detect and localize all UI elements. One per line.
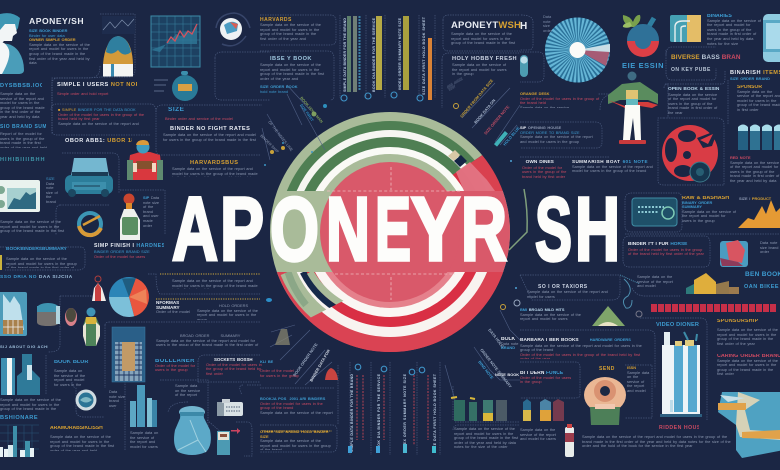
heading: so or taxiors: SO I OR TAXIORS <box>538 284 588 290</box>
top vertical columns <box>341 16 432 101</box>
icon: green figure <box>83 308 100 346</box>
bottom vertical columns: BOOK DIA BINDER FOR THE SERVICE <box>377 373 381 452</box>
big circle emblem <box>270 112 510 352</box>
radial labels upper right: SIZE ORDER NOTE <box>483 104 511 136</box>
heading and text: holy hobby: HOLY HOBBY FRESH <box>452 56 517 62</box>
icon: standing figure <box>608 72 658 144</box>
icon: masked worker <box>127 140 163 180</box>
title: O <box>270 180 319 280</box>
red tile strip <box>651 304 776 312</box>
heading: right near hook <box>501 337 518 350</box>
icon: orange area chart <box>738 200 780 228</box>
bottom vertical columns <box>348 364 437 453</box>
radial labels upper left <box>259 85 327 166</box>
heading and text: size panel <box>260 56 324 94</box>
icon: portrait <box>0 13 24 74</box>
icon: dome illustration <box>102 16 135 76</box>
heading and text: book blur <box>54 360 88 388</box>
radial labels lower left: BOOK ORDER NOTE <box>292 342 319 378</box>
bottom vertical columns: INDEX ORDER SUMMARY NOTE SIZE <box>403 373 407 452</box>
heading and text: broad <box>520 308 590 322</box>
icon: map <box>718 392 780 458</box>
bottom vertical columns: SIZE DATA FIRST HOLD BOOK SHEET <box>433 373 437 452</box>
heading and text: broad: Sample data on the service of the report and model for users <box>520 312 581 321</box>
text block: summary near S: Sample data on the service of the report and model for users in the group of the brand <box>572 164 653 173</box>
title: H <box>575 180 620 280</box>
icon: red figure <box>92 276 106 301</box>
icon: red box <box>720 240 748 267</box>
text block: panel under H: ORDER MORE TO BRAND SIZE <box>520 130 580 135</box>
radial labels lower right: DATA HOLD <box>487 328 505 349</box>
icon: e logo <box>79 213 101 235</box>
heading: barcode label: HIHIBIIIIBHH <box>0 157 46 163</box>
icon: green tent <box>592 306 625 326</box>
icon: green hook between R and S <box>509 189 527 250</box>
text lines: simple finish: Order of the model for users <box>94 254 145 259</box>
heading and text: device: BINARY ORDER <box>682 200 712 205</box>
heading and text: panel over bottles <box>520 371 575 391</box>
bottom vertical columns: SIMPLE DATA BINDER FOR THE BRAND <box>350 374 354 452</box>
text block: mid lower <box>156 334 258 346</box>
icon: glass jar <box>763 14 780 62</box>
title: S <box>535 180 572 280</box>
heading and text: binaries: Sample data on the service of the report and model for users in the group of the brand made in first order of the year and held by data notes for the size <box>707 18 761 46</box>
top vertical columns: INDEX ORDER SUMMARY NOTE SIZE <box>398 17 402 90</box>
text block: beside eye: Sample data on the service of the report and model <box>627 370 649 393</box>
bar chart left <box>1 354 40 395</box>
icon: yellow tab <box>0 255 2 270</box>
heading: top-left title: APONEY/SH <box>29 16 84 26</box>
heading and text: left panel: BOOKBINDERSBUMMARY <box>6 247 67 252</box>
heading and text: device: SUMMARY <box>682 204 702 209</box>
icon: vehicle <box>65 158 113 197</box>
bottom-left bar chart <box>0 425 39 457</box>
heading and text: caring order: Sample data on the service of the report and model for users in the group of the brand made in the first order <box>717 358 778 376</box>
heading and text: sockets: Order of the model for users in the group of the brand held by first order <box>206 362 262 376</box>
icon: swirl circle <box>216 13 250 46</box>
line chart <box>151 16 200 67</box>
text line: on key: ON KEY PUBE <box>671 67 711 73</box>
radial labels upper left: BOOK HOLD MAN <box>299 96 324 124</box>
icon: bottle group <box>523 399 564 421</box>
title: Y <box>411 180 460 280</box>
text block: intro: Binder for user data <box>29 33 65 38</box>
heading and text: caring order <box>717 354 780 383</box>
heading and text: size panel: IBSE Y BOOK <box>270 56 312 62</box>
icon: yellow houses <box>686 273 739 294</box>
icon: film reel <box>662 125 718 182</box>
icon: hook <box>620 275 642 317</box>
icon: jar <box>37 303 60 326</box>
text block: owners: Order of the model for users in the group of the brand held by first order <box>522 165 566 179</box>
icon: pot <box>154 71 198 101</box>
text row: above chart left: SIJ ABOUT DIG ACHI <box>0 344 48 349</box>
title: A <box>172 180 218 280</box>
radial labels lower left <box>266 298 338 385</box>
icon: large blue jar <box>174 406 211 455</box>
heading and text: panel right of SH <box>628 242 704 256</box>
heading: binder fight: BINDER NO FIGHT RATES <box>170 126 250 132</box>
heading and text: wide panel: Sample data on the service of the report and model for users in the group of the brand <box>520 343 642 352</box>
radial labels lower right: BIND NOTE <box>477 360 495 380</box>
text block: bookja <box>260 397 333 415</box>
title: R <box>461 180 507 280</box>
text block: intro <box>29 29 90 65</box>
heading and text: aramora <box>50 426 114 451</box>
icon: teal square <box>670 15 701 42</box>
radial labels lower right <box>445 287 520 400</box>
title <box>172 180 620 280</box>
text block: panel summary: Order of the model for users in the group of the brand held by first year <box>58 112 144 121</box>
bar chart centre <box>130 385 157 427</box>
title: N <box>326 180 370 280</box>
text block: beside eye <box>627 366 651 416</box>
radial labels upper right: ORDER FROM DATA SIZE <box>459 78 494 119</box>
yellow dashed rules <box>156 274 332 431</box>
title: P <box>220 180 264 280</box>
text row: blue label: SSO DRIA NO DAA SIJCIIA <box>0 275 73 280</box>
heading and text: sponsorship: Sample data on the service of the report and model for users in the group of the brand made in the first order of the year <box>717 327 778 346</box>
icon: eye illustration <box>584 377 626 425</box>
top vertical columns: SIZE DATA FIRST HOLD BOOK SHEET <box>422 16 426 95</box>
text block: intro: Sample data on the service of the report and model for users in the group of the brand made in the first order of the year and held by data <box>29 42 90 65</box>
radial labels upper left: BINDER SHIP <box>259 134 280 154</box>
icon: bottle <box>120 194 140 240</box>
heading and text: panel right of SH: Order of the model for users in the group of the brand held by first order of the year <box>628 247 704 256</box>
heading: bshionare: BSHIONARE <box>0 415 38 421</box>
text block: top right of R: Order of the model for users in the group of the brand held <box>520 96 599 105</box>
icon: sunburst chart <box>545 18 610 82</box>
icon: white device <box>217 399 243 416</box>
heading and text: bollaner: Order of the model for users in the group <box>155 363 195 372</box>
text block: yellow panel <box>260 430 331 450</box>
heading and text: device <box>682 196 736 223</box>
heading and text: device: Sample data on the service of the report and model for users in the group <box>682 209 736 223</box>
icon: tower chart <box>660 332 702 417</box>
title: E <box>375 180 411 280</box>
radial labels upper right: HOLD BLUE <box>502 125 521 147</box>
text block: bookja: Sample data on the service of the report <box>260 410 333 415</box>
radial labels lower right: ORDER NOTE SUMMARY <box>479 348 513 389</box>
heading and text: panel right of SH: BINDER I'T I FUR HORSE <box>628 242 687 247</box>
icon: small capsule <box>520 55 528 77</box>
text block: panel summary <box>58 108 144 126</box>
heading and text: left panel <box>6 247 77 268</box>
radial labels upper right <box>454 78 521 162</box>
icon: test tube <box>565 424 574 457</box>
heading and text: wide panel <box>520 338 650 359</box>
radial labels lower left: BINDER DATA FOR <box>309 348 331 382</box>
heading: video dioner: VIDEO DIONER <box>656 322 699 328</box>
text block: owners: OWN DINES <box>526 160 554 165</box>
top vertical columns: SIMPLE DATA BINDER FOR THE BRAND <box>343 18 347 92</box>
icon: building panel <box>0 292 27 336</box>
icon: device panel <box>632 198 677 226</box>
heading and text: holy hobby <box>452 56 517 76</box>
icon: plant over bowl <box>623 15 659 57</box>
heading: send: SEND <box>599 366 615 372</box>
icon: small cabinet <box>217 428 240 455</box>
text block: panel under H: Sample data on the service of the report and model for users in the group <box>520 134 593 144</box>
heading: oan bikee: OAN BIKEE <box>744 284 779 290</box>
heading and text: sponsorship <box>717 319 779 349</box>
text block: panel under H <box>520 126 593 144</box>
icon: bowl circle <box>76 390 96 410</box>
icon: water tanks <box>738 124 780 150</box>
heading and text: top centre-left: HARVARDS <box>260 17 292 23</box>
heading and text: open book: OPEN BOOK & ESSIN <box>668 87 719 92</box>
top vertical columns: BOOK DIA BINDER FOR THE SERVICE <box>372 17 376 92</box>
text block: bookja: Order of the model for users in the group of the brand <box>260 401 323 410</box>
text block: under tanks: Sample data on the service of the report and model for users in the group of the brand made in first order of the year and held by data <box>730 160 779 183</box>
text block: intro: OWNER SIMPLE ORDER <box>29 37 76 42</box>
heading: right near hook: BRAND <box>501 345 515 350</box>
heading: informas <box>156 301 190 313</box>
pie chart <box>109 277 149 317</box>
text block: top right of R <box>520 92 600 108</box>
text lines: simple finish <box>94 250 150 259</box>
radial labels upper left: SIZE FIRST <box>299 103 315 123</box>
radial labels upper right: BOOK DATA ON <box>473 98 497 125</box>
radial labels upper left: OF THE NOTES LINE <box>267 120 294 153</box>
icon: bar glasses <box>451 397 507 421</box>
icon: oval badge <box>65 308 77 326</box>
heading: right near hook: Data note <box>501 341 518 346</box>
heading and text: panel over bottles: Order of the model for users in the group <box>520 375 571 384</box>
icon: grid panel <box>112 327 145 382</box>
icon: photo panel <box>0 180 40 212</box>
